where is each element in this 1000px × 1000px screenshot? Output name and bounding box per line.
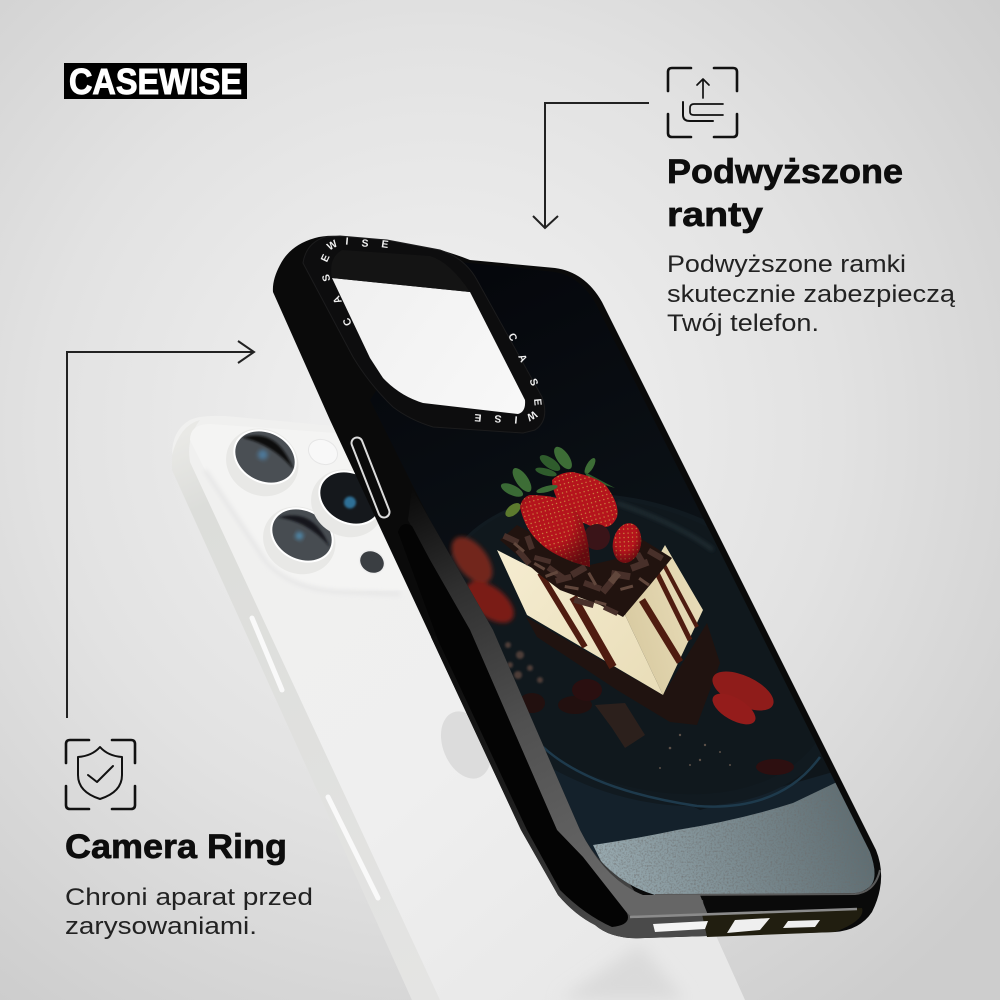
ring lettering: W: [524, 408, 539, 423]
ring lettering: W: [325, 238, 340, 253]
ring inner wall: [331, 250, 470, 292]
white phone: [172, 416, 745, 1000]
ring lettering: C: [340, 315, 355, 328]
ring lettering: S: [320, 273, 333, 283]
icon: raised edges: [668, 68, 737, 137]
ring lettering: I: [514, 413, 518, 425]
cake cream side: [497, 550, 663, 695]
ring lettering: E: [474, 411, 482, 424]
concrete table: [593, 782, 874, 895]
arrow: raised edges: [533, 103, 649, 228]
text: camera ring description: Chroni aparat przed: [65, 884, 313, 911]
plate: [451, 496, 821, 808]
logo: CASEWISE: CASEWISE: [69, 61, 242, 102]
chocolate shavings: [500, 525, 672, 617]
lens top: [214, 416, 310, 509]
icon: shield: [66, 740, 135, 809]
dark cloth: [554, 770, 836, 860]
ring lettering: S: [361, 237, 369, 250]
lens bottom: [251, 494, 347, 587]
side button: action: [252, 618, 282, 690]
black case: [273, 236, 891, 938]
lens right: [299, 457, 395, 550]
heading: Podwyższone ranty: Podwyższone: [667, 153, 903, 191]
ring lettering: [319, 236, 544, 425]
blurred chocolate crumbs: [505, 642, 543, 683]
microphone sensor: [355, 546, 389, 578]
strawberry slices, right: [712, 672, 774, 724]
small strawberry: [612, 523, 642, 563]
blurred strawberry slices, left: [448, 534, 516, 626]
text: camera ring description: zarysowaniami.: [65, 913, 257, 940]
arrow: camera ring: [67, 341, 254, 718]
picture edge rim: [655, 870, 880, 895]
front strawberry: [499, 465, 590, 567]
ring lettering: A: [330, 293, 345, 306]
ring lettering: E: [381, 238, 389, 251]
ring lettering: C: [505, 331, 520, 344]
apple logo imprint: [432, 704, 500, 786]
port: speaker: [653, 921, 708, 932]
camera ring: [303, 236, 545, 433]
port: usb-c: [727, 918, 770, 933]
crumbs on plate: [659, 734, 731, 769]
heading: Podwyższone ranty: ranty: [667, 196, 763, 234]
port: microphone: [783, 920, 820, 928]
heading: Camera Ring: Camera Ring: [65, 828, 287, 866]
case side wall, lower part: [431, 630, 707, 938]
back strawberry: [534, 444, 618, 527]
gray side band: [408, 488, 708, 917]
text: raised edges description: skutecznie zabezpieczą: [667, 281, 955, 308]
text: raised edges description: Podwyższone ramki: [667, 251, 906, 278]
side button: volume: [328, 797, 378, 898]
syrup drops and chocolate chunks: [519, 679, 794, 775]
flash: [304, 435, 342, 469]
olive bottom edge: [702, 908, 862, 937]
ring lettering: S: [527, 377, 540, 388]
black side slot: [398, 524, 628, 927]
ring opening: [332, 278, 525, 414]
chocolate syrup stripes: [540, 563, 697, 667]
cake cream end: [625, 545, 703, 695]
dark berry: [584, 524, 610, 550]
ring lettering: S: [494, 412, 502, 425]
text: raised edges description: Twój telefon.: [667, 310, 819, 337]
rear bottom highlight: [630, 909, 857, 917]
camera plateau: [190, 424, 410, 594]
ring lettering: E: [531, 398, 544, 406]
volume button cutout: [357, 443, 384, 512]
ring lettering: A: [515, 352, 530, 365]
ring lettering: I: [345, 236, 349, 248]
cake crust: [526, 617, 720, 725]
ring lettering: E: [319, 253, 333, 264]
printed back: cheesecake: [422, 401, 875, 895]
